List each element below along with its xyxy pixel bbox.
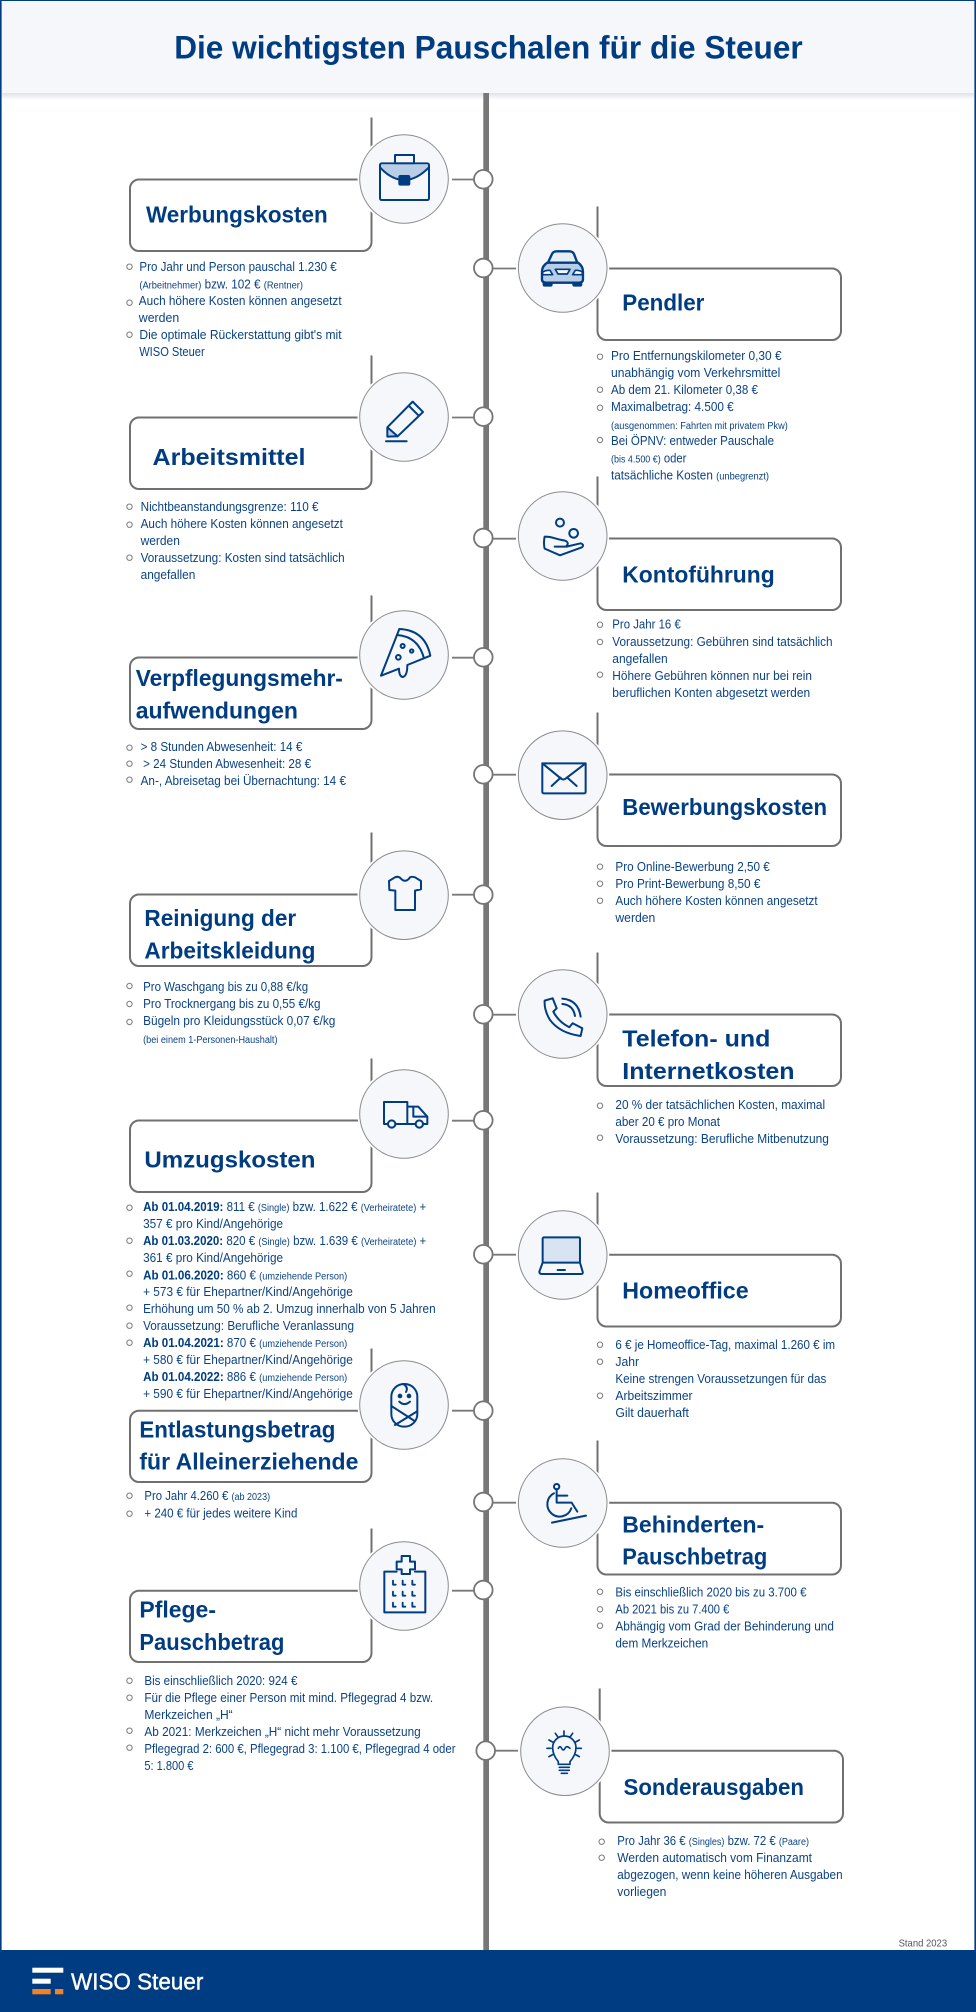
heading: Kontoführung — [622, 562, 775, 588]
bullet list: Auch höhere Kosten können angesetzt — [141, 517, 343, 531]
panel: Umzugskosten — [127, 1058, 493, 1401]
bullet list — [597, 618, 833, 700]
bullet list — [597, 1338, 835, 1420]
bullet list — [127, 980, 335, 1046]
bullet list: An-, Abreisetag bei Übernachtung: 14 € — [141, 774, 346, 788]
bullet list: Voraussetzung: Gebühren sind tatsächlich — [612, 635, 833, 649]
bullet list: Erhöhung um 50 % ab 2. Umzug innerhalb von 5 Jahren — [143, 1302, 436, 1316]
bullet list — [597, 349, 788, 482]
bullet list: Jahr — [615, 1355, 639, 1369]
icon: briefcase — [360, 135, 448, 223]
heading: für Alleinerziehende — [139, 1448, 358, 1474]
icon: pizza slice — [360, 611, 448, 699]
heading: Telefon- und — [622, 1026, 770, 1052]
heading: Reinigung der — [144, 905, 296, 931]
heading — [136, 665, 343, 723]
footnote: Stand 2023: Stand 2023 — [899, 1938, 947, 1950]
bullet list: werden — [140, 534, 180, 548]
bullet list: Pro Print-Bewerbung 8,50 € — [615, 877, 760, 891]
bullet list: 361 € pro Kind/Angehörige — [143, 1251, 283, 1265]
bullet list: Pro Jahr 4.260 € (ab 2023) — [144, 1489, 270, 1503]
bullet list: + 573 € für Ehepartner/Kind/Angehörige — [143, 1285, 353, 1299]
heading: Sonderausgaben — [624, 1774, 804, 1800]
icon: pencil — [360, 373, 448, 461]
bullet list — [127, 1200, 436, 1401]
panel: Behinderten-Pauschbetrag — [474, 1440, 841, 1651]
bullet list: Nichtbeanstandungsgrenze: 110 € — [141, 500, 319, 514]
bullet list — [127, 740, 346, 788]
bullet list: Ab dem 21. Kilometer 0,38 € — [611, 383, 758, 397]
footer band — [0, 1950, 976, 2012]
bullet list: (Arbeitnehmer) bzw. 102 € (Rentner) — [139, 277, 303, 291]
bullet list: Merkzeichen „H“ — [144, 1708, 233, 1722]
bullet list: tatsächliche Kosten (unbegrenzt) — [611, 468, 769, 482]
heading: Behinderten- — [622, 1512, 764, 1538]
bullet list — [127, 260, 342, 359]
icon: hospital building — [360, 1542, 448, 1630]
bullet list: Pro Trocknergang bis zu 0,55 €/kg — [143, 997, 320, 1011]
title: Die wichtigsten Pauschalen für die Steuer — [174, 29, 803, 65]
bullet list: Höhere Gebühren können nur bei rein — [612, 669, 812, 683]
heading: Verpflegungsmehr- — [136, 665, 343, 691]
bullet list: aber 20 € pro Monat — [615, 1115, 720, 1129]
bullet list: werden — [614, 911, 655, 925]
panel: Sonderausgaben — [476, 1688, 843, 1899]
bullet list: Voraussetzung: Kosten sind tatsächlich — [141, 551, 345, 565]
bullet list: Bis einschließlich 2020: 924 € — [144, 1674, 297, 1688]
panel: Reinigung der Arbeitskleidung — [127, 832, 493, 1046]
bullet list — [127, 1489, 297, 1521]
bullet list: Pro Online-Bewerbung 2,50 € — [615, 860, 770, 874]
panel: Homeoffice — [474, 1192, 841, 1420]
bullet list — [127, 500, 345, 582]
heading — [139, 1417, 358, 1474]
icon: light bulb — [521, 1707, 609, 1795]
header band — [0, 0, 976, 93]
bullet list: Ab 2021: Merkzeichen „H“ nicht mehr Voraussetzung — [144, 1725, 421, 1739]
bullet list: (ausgenommen: Fahrten mit privatem Pkw) — [611, 421, 788, 432]
bullet list: Ab 2021 bis zu 7.400 € — [615, 1603, 729, 1617]
bullet list: + 580 € für Ehepartner/Kind/Angehörige — [143, 1353, 353, 1367]
bullet list: Ab 01.04.2021: 870 € (umziehende Person) — [143, 1336, 347, 1350]
heading — [139, 1596, 284, 1655]
bullet list: Für die Pflege einer Person mit mind. Pflegegrad 4 bzw. — [144, 1691, 433, 1705]
bullet list: Bei ÖPNV: entweder Pauschale — [611, 434, 774, 448]
heading: Pendler — [622, 290, 704, 316]
bullet list: Gilt dauerhaft — [615, 1406, 689, 1420]
icon: laptop — [518, 1211, 607, 1299]
bullet list: beruflichen Konten abgesetzt werden — [612, 686, 810, 700]
panel: Bewerbungskosten — [474, 712, 841, 925]
heading: Arbeitskleidung — [144, 937, 316, 963]
bullet list — [597, 860, 818, 925]
bullet list — [599, 1834, 843, 1899]
heading: Bewerbungskosten — [622, 794, 827, 820]
bullet list: + 590 € für Ehepartner/Kind/Angehörige — [143, 1387, 353, 1401]
panel: Arbeitsmittel — [127, 356, 493, 582]
bullet list: Arbeitszimmer — [615, 1389, 693, 1403]
bullet list: Pflegegrad 2: 600 €, Pflegegrad 3: 1.100 €, Pflegegrad 4 oder — [144, 1742, 456, 1756]
heading: aufwendungen — [136, 697, 298, 723]
bullet list: 357 € pro Kind/Angehörige — [143, 1217, 283, 1231]
bullet list: Auch höhere Kosten können angesetzt — [615, 894, 818, 908]
bullet list: Werden automatisch vom Finanzamt — [617, 1851, 812, 1865]
timeline axis — [483, 93, 489, 1950]
panel: Verpflegungsmehraufwendungen — [127, 596, 493, 788]
bullet list: abgezogen, wenn keine höheren Ausgaben — [617, 1868, 843, 1882]
bullet list: Bis einschließlich 2020 bis zu 3.700 € — [615, 1586, 806, 1600]
heading: Arbeitsmittel — [152, 444, 306, 470]
panel: Kontoführung — [474, 476, 841, 700]
heading — [144, 905, 316, 963]
bullet list — [597, 1098, 829, 1146]
bullet list: Pro Waschgang bis zu 0,88 €/kg — [143, 980, 308, 994]
panel: Telefon- und Internetkosten — [474, 952, 841, 1146]
heading: Entlastungsbetrag — [139, 1417, 335, 1443]
heading: Homeoffice — [622, 1278, 749, 1304]
bullet list: + 240 € für jedes weitere Kind — [144, 1507, 297, 1521]
bullet list: Ab 01.04.2022: 886 € (umziehende Person) — [143, 1370, 347, 1384]
bullet list: 6 € je Homeoffice-Tag, maximal 1.260 € im — [615, 1338, 835, 1352]
bullet list: > 8 Stunden Abwesenheit: 14 € — [141, 740, 302, 754]
heading: Umzugskosten — [144, 1146, 316, 1172]
panel: Werbungskosten — [127, 118, 493, 359]
panel: Pflege-Pauschbetrag — [127, 1528, 493, 1773]
bullet list: Pro Entfernungskilometer 0,30 € — [611, 349, 782, 363]
icon: swaddled baby — [360, 1361, 448, 1449]
panel: Entlastungsbetrag für Alleinerziehende — [127, 1348, 493, 1521]
bullet list: (bei einem 1-Personen-Haushalt) — [143, 1035, 278, 1046]
heading: Pauschbetrag — [139, 1629, 284, 1655]
bullet list: Bügeln pro Kleidungsstück 0,07 €/kg — [143, 1014, 335, 1028]
logo mark — [32, 1968, 63, 1994]
bullet list: Ab 01.06.2020: 860 € (umziehende Person) — [143, 1268, 347, 1282]
bullet list: Keine strengen Voraussetzungen für das — [615, 1372, 826, 1386]
bullet list: Voraussetzung: Berufliche Mitbenutzung — [615, 1132, 829, 1146]
bullet list — [597, 1586, 834, 1651]
bullet list: unabhängig vom Verkehrsmittel — [611, 366, 780, 380]
heading — [622, 1512, 767, 1569]
heading: Werbungskosten — [146, 202, 328, 228]
bullet list: Ab 01.03.2020: 820 € (Single) bzw. 1.639 € (Verheiratete) + — [143, 1234, 426, 1248]
bullet list: Abhängig vom Grad der Behinderung und — [615, 1620, 834, 1634]
bullet list: Die optimale Rückerstattung gibt's mit — [139, 328, 342, 342]
bullet list: Voraussetzung: Berufliche Veranlassung — [143, 1319, 354, 1333]
icon: moving truck — [360, 1070, 448, 1158]
icon: t-shirt — [360, 851, 448, 940]
bullet list: 5: 1.800 € — [144, 1759, 194, 1773]
bullet list: 20 % der tatsächlichen Kosten, maximal — [615, 1098, 825, 1112]
icon: car — [518, 224, 607, 312]
bullet list: > 24 Stunden Abwesenheit: 28 € — [143, 757, 311, 771]
bullet list: angefallen — [141, 568, 195, 582]
logo wordmark: WISO Steuer — [71, 1968, 204, 1994]
icon: envelope — [518, 731, 607, 820]
icon: hand with coins — [518, 492, 607, 580]
bullet list — [127, 1674, 456, 1773]
bullet list: vorliegen — [617, 1885, 666, 1899]
bullet list: (bis 4.500 €) oder — [611, 452, 686, 466]
heading: Internetkosten — [622, 1058, 795, 1084]
bullet list: dem Merkzeichen — [615, 1637, 708, 1651]
icon: wheelchair on ramp — [518, 1459, 607, 1547]
bullet list: Pro Jahr und Person pauschal 1.230 € — [139, 260, 337, 274]
bullet list: Pro Jahr 36 € (Singles) bzw. 72 € (Paare) — [617, 1834, 809, 1848]
icon: phone — [518, 970, 607, 1058]
heading: Pflege- — [139, 1596, 216, 1622]
bullet list: angefallen — [612, 652, 668, 666]
panel: Pendler — [474, 206, 841, 482]
heading: Pauschbetrag — [622, 1543, 767, 1569]
bullet list: werden — [138, 311, 179, 325]
heading — [622, 1026, 795, 1084]
bullet list: WISO Steuer — [139, 345, 205, 359]
bullet list: Pro Jahr 16 € — [612, 618, 681, 632]
bullet list: Ab 01.04.2019: 811 € (Single) bzw. 1.622 € (Verheiratete) + — [143, 1200, 426, 1214]
bullet list: Auch höhere Kosten können angesetzt — [139, 294, 342, 308]
bullet list: Maximalbetrag: 4.500 € — [611, 400, 734, 414]
